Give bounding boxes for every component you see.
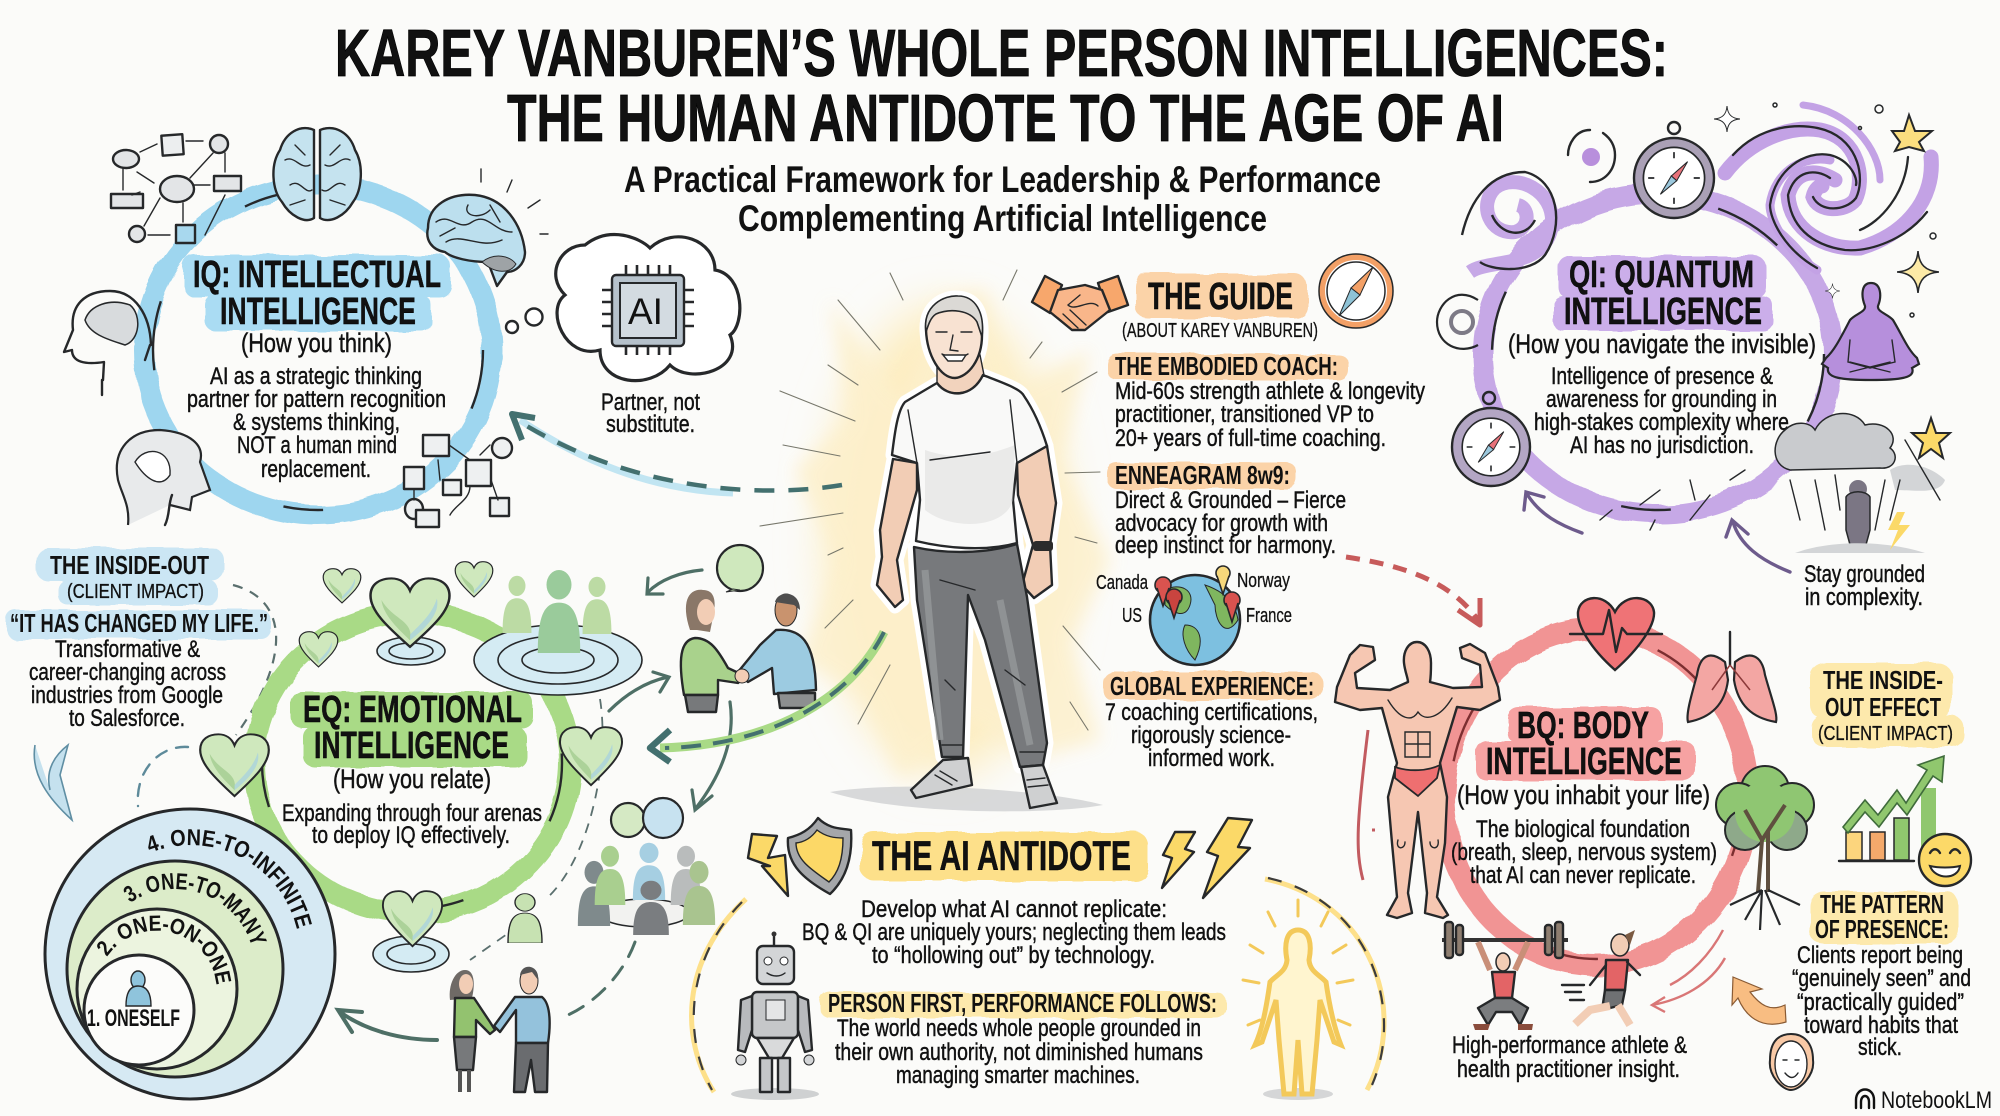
panel: BQ body intelligence <box>1335 598 1814 1083</box>
icon: head profile with brain <box>64 291 151 395</box>
IQ text <box>187 328 446 483</box>
BQ heading: BQ: BODY <box>1517 705 1649 747</box>
icon: side brain <box>427 169 548 286</box>
icon: left swirl <box>1437 295 1478 349</box>
QI text: (How you navigate the invisible) <box>1508 329 1816 359</box>
BQ caption: health practitioner insight. <box>1457 1056 1680 1083</box>
enneagram text: Direct & Grounded – Fierce <box>1115 487 1346 514</box>
BQ text: that AI can never replicate. <box>1470 862 1696 889</box>
icon: smiling face <box>1770 1034 1813 1090</box>
person first text: The world needs whole people grounded in <box>837 1015 1201 1042</box>
antidote heading: THE AI ANTIDOTE <box>872 832 1131 879</box>
embodied coach text: 20+ years of full-time coaching. <box>1115 425 1386 452</box>
panel: pattern of presence: “practically guided” <box>1797 989 1964 1016</box>
caption: stay grounded <box>1804 561 1925 611</box>
ground shadow <box>830 787 1103 811</box>
panel: pattern of presence: THE PATTERN <box>1820 889 1944 919</box>
icon: heart with pulse <box>1570 598 1662 670</box>
antidote text: Develop what AI cannot replicate: <box>861 896 1167 923</box>
arrow: blue swoosh <box>34 745 72 820</box>
icon: runner <box>1562 930 1640 1025</box>
thought cloud with chip: AI <box>628 291 663 332</box>
panel: the AI antidote <box>692 818 1384 1100</box>
BQ heading <box>1476 705 1695 783</box>
globe labels: US <box>1122 605 1142 627</box>
globe labels: Norway <box>1237 570 1290 592</box>
panel: client impact left: THE INSIDE-OUT <box>50 550 209 580</box>
QI ring <box>1483 194 1833 514</box>
BQ text: (How you inhabit your life) <box>1457 780 1710 810</box>
EQ text: to deploy IQ effectively. <box>312 822 510 849</box>
BQ caption <box>1452 1032 1687 1083</box>
panel: inside-out effect: THE INSIDE- <box>1823 665 1943 695</box>
EQ heading <box>291 689 533 767</box>
panel: inside-out effect <box>1810 663 1964 747</box>
IQ heading <box>183 254 451 333</box>
IQ text: (How you think) <box>241 328 392 358</box>
panel: client impact left: Transformative & <box>55 636 200 663</box>
icon: glowing yellow body <box>1243 900 1353 1100</box>
arc: dashed yellow right <box>1265 878 1384 1090</box>
globe labels: France <box>1246 605 1292 627</box>
QI heading: INTELLIGENCE <box>1564 291 1762 333</box>
panel: client impact left: “IT HAS CHANGED MY LIFE.” <box>10 608 268 638</box>
arena 1 oneself: 1. ONESELF <box>87 1005 180 1032</box>
icon: globe with pins <box>1150 566 1240 665</box>
arena 3 one-to-many <box>66 860 284 1078</box>
QI text: high-stakes complexity where <box>1534 409 1789 436</box>
icon: network diagram top left <box>111 134 241 243</box>
panel: inside-out effect: (CLIENT IMPACT) <box>1818 723 1953 745</box>
enneagram text <box>1107 460 1346 559</box>
QI text: awareness for grounding in <box>1546 386 1777 413</box>
title: THE HUMAN ANTIDOTE TO THE AGE OF AI <box>507 81 1504 156</box>
IQ text: AI as a strategic thinking <box>210 363 422 390</box>
thought cloud with chip <box>506 235 740 381</box>
icon: small person <box>508 894 542 943</box>
EQ text: (How you relate) <box>333 764 491 794</box>
IQ text: NOT a human mind <box>237 432 397 459</box>
icon: cycle circle <box>1568 130 1615 182</box>
icon: small left spiral <box>1462 172 1556 272</box>
enneagram text: advocacy for growth with <box>1115 510 1328 537</box>
caption: Partner, not <box>601 389 700 416</box>
man <box>877 296 1057 808</box>
arena 4 one-to-infinite <box>44 808 336 1100</box>
guide heading: (ABOUT KAREY VANBUREN) <box>1122 320 1318 342</box>
icon: sparkles and stars <box>1714 103 1939 317</box>
panel: the guide <box>1032 254 1425 772</box>
panel: client impact left <box>6 548 271 732</box>
icon: left compass <box>1452 392 1530 486</box>
global experience text <box>1102 671 1322 772</box>
BQ ring <box>1444 629 1748 965</box>
icon: barbell lifter <box>1442 922 1568 1030</box>
head <box>926 297 982 378</box>
icon: couple handshake top <box>681 590 816 712</box>
neck <box>937 355 984 393</box>
embodied coach text: Mid-60s strength athlete & longevity <box>1115 378 1425 405</box>
panel: pattern of presence: stick. <box>1858 1034 1902 1061</box>
antidote text: to “hollowing out” by technology. <box>872 942 1155 969</box>
subtitle: A Practical Framework for Leadership & Performance <box>624 159 1381 200</box>
subtitle: Complementing Artificial Intelligence <box>738 198 1267 239</box>
icon: right lightning bolts <box>1162 818 1252 898</box>
QI text <box>1508 329 1816 459</box>
panel: pattern of presence: toward habits that <box>1804 1012 1958 1039</box>
panel: pattern of presence <box>1792 889 1971 1061</box>
global experience text: rigorously science- <box>1131 722 1291 749</box>
face <box>936 332 972 361</box>
arrows: relationship arrows <box>138 570 731 1040</box>
arrow: red swoosh <box>1652 930 1725 1012</box>
person first text: their own authority, not diminished humans <box>835 1039 1203 1066</box>
panel: pattern of presence: Clients report being <box>1797 942 1963 969</box>
enneagram text: deep instinct for harmony. <box>1115 532 1336 559</box>
icon: top brain <box>273 128 361 220</box>
arc: dashed yellow left <box>692 899 746 1092</box>
panel: client impact left: (CLIENT IMPACT) <box>67 581 204 603</box>
caption: stay grounded: Stay grounded <box>1804 561 1925 588</box>
caption: substitute. <box>606 411 695 438</box>
panel: client impact left: industries from Google <box>31 682 223 709</box>
EQ ring <box>254 613 603 960</box>
icon: meeting group <box>578 798 715 935</box>
IQ text: replacement. <box>261 456 371 483</box>
white halo <box>877 297 1056 767</box>
icon: couple handshake bottom <box>450 967 550 1092</box>
title <box>335 16 1668 156</box>
arrow: orange up-left <box>1732 977 1786 1024</box>
icon: meditating figure <box>1822 283 1919 380</box>
antidote text <box>802 896 1226 969</box>
arrow: dashed red from guide to BQ <box>1346 557 1480 625</box>
person first text: PERSON FIRST, PERFORMANCE FOLLOWS: <box>828 988 1217 1018</box>
icon: shield <box>788 818 851 894</box>
hair <box>926 296 983 337</box>
t-shirt <box>892 375 1047 548</box>
trousers <box>914 544 1047 767</box>
BQ text: The biological foundation <box>1476 816 1690 843</box>
panel: EQ emotional intelligence <box>138 545 884 1092</box>
caption: stay grounded: in complexity. <box>1805 584 1923 611</box>
panel: client impact left: career-changing across <box>29 659 226 686</box>
guide heading: THE GUIDE <box>1148 276 1293 318</box>
EQ text <box>282 764 542 849</box>
arrows: purple <box>1524 492 1790 572</box>
arrow: thin dashed from client impact to EQ <box>233 585 276 735</box>
panel: client impact left: to Salesforce. <box>69 705 185 732</box>
IQ text: partner for pattern recognition <box>187 386 446 413</box>
global experience text: 7 coaching certifications, <box>1105 699 1318 726</box>
icon: muscular figure <box>1335 642 1500 918</box>
arena 1 oneself <box>84 955 194 1065</box>
icon: flowchart bottom right <box>404 435 512 527</box>
radiating glow <box>760 270 1110 780</box>
QI text: Intelligence of presence & <box>1551 363 1773 390</box>
IQ heading: IQ: INTELLECTUAL <box>193 254 441 296</box>
panel: QI quantum intelligence <box>1437 103 1950 611</box>
icon: speech bubble <box>717 545 763 592</box>
watch <box>1033 541 1053 551</box>
EQ heading: EQ: EMOTIONAL <box>303 689 522 731</box>
person first text: managing smarter machines. <box>896 1062 1140 1089</box>
arrow: dashed green from man to EQ <box>650 632 884 762</box>
icon: two overlapping heads <box>117 430 210 525</box>
arena 2 one-on-one <box>76 908 238 1070</box>
icon: storm cloud with figure <box>1775 414 1950 553</box>
shoes <box>911 758 1057 808</box>
central figure: glow and man <box>760 270 1110 811</box>
icon: smiley <box>1919 834 1971 886</box>
panel: inside-out effect: OUT EFFECT <box>1825 692 1941 722</box>
arms <box>877 446 1056 607</box>
embodied coach text: practitioner, transitioned VP to <box>1115 401 1374 428</box>
panel: IQ intellectual intelligence <box>64 128 842 527</box>
icon: compass <box>1319 254 1393 328</box>
caption <box>601 389 700 438</box>
arena 4 one-to-infinite: 4. ONE-TO-INFINITE <box>148 829 312 929</box>
icon: left lightning bolt <box>748 834 788 896</box>
arrow: dashed from man to IQ <box>512 414 842 493</box>
globe labels: Canada <box>1096 572 1149 594</box>
person first text <box>820 988 1226 1089</box>
particles <box>1600 470 1745 530</box>
BQ text: (breath, sleep, nervous system) <box>1451 839 1717 866</box>
icon: large purple spiral <box>1725 105 1931 270</box>
antidote text: BQ & QI are uniquely yours; neglecting them leads <box>802 919 1226 946</box>
global experience text: informed work. <box>1148 745 1275 772</box>
icon: handshake <box>1032 276 1128 330</box>
EQ text: Expanding through four arenas <box>282 800 542 827</box>
icon: tree <box>1716 766 1814 930</box>
arena 2 one-on-one: 2. ONE-ON-ONE <box>97 916 232 984</box>
IQ text: & systems thinking, <box>233 409 400 436</box>
enneagram text: ENNEAGRAM 8w9: <box>1115 460 1290 490</box>
icon: people group <box>503 570 611 653</box>
icon: lungs <box>1687 632 1776 722</box>
guide heading <box>1122 274 1318 342</box>
IQ ring <box>144 185 492 515</box>
embodied coach text <box>1107 351 1425 452</box>
QI heading <box>1553 254 1773 333</box>
icon: robot <box>731 932 819 1100</box>
BQ text <box>1451 780 1717 889</box>
chart: growth bars and arrow <box>1839 756 1944 861</box>
BQ caption: High-performance athlete & <box>1452 1032 1687 1059</box>
icon: top compass <box>1634 122 1714 218</box>
embodied coach text: THE EMBODIED COACH: <box>1115 351 1338 381</box>
QI text: AI has no jurisdiction. <box>1570 432 1754 459</box>
global experience text: GLOBAL EXPERIENCE: <box>1110 671 1314 701</box>
subtitle <box>624 159 1381 239</box>
QI heading: QI: QUANTUM <box>1569 254 1754 296</box>
EQ heading: INTELLIGENCE <box>314 725 509 767</box>
icon: ripples and hearts <box>200 562 642 972</box>
arena 3 one-to-many: 3. ONE-TO-MANY <box>124 873 267 943</box>
BQ heading: INTELLIGENCE <box>1486 741 1682 783</box>
chart: four nested arenas <box>44 808 336 1100</box>
cloud: AI partner callout <box>506 235 740 438</box>
IQ heading: INTELLIGENCE <box>220 291 416 333</box>
globe labels <box>1096 570 1292 627</box>
